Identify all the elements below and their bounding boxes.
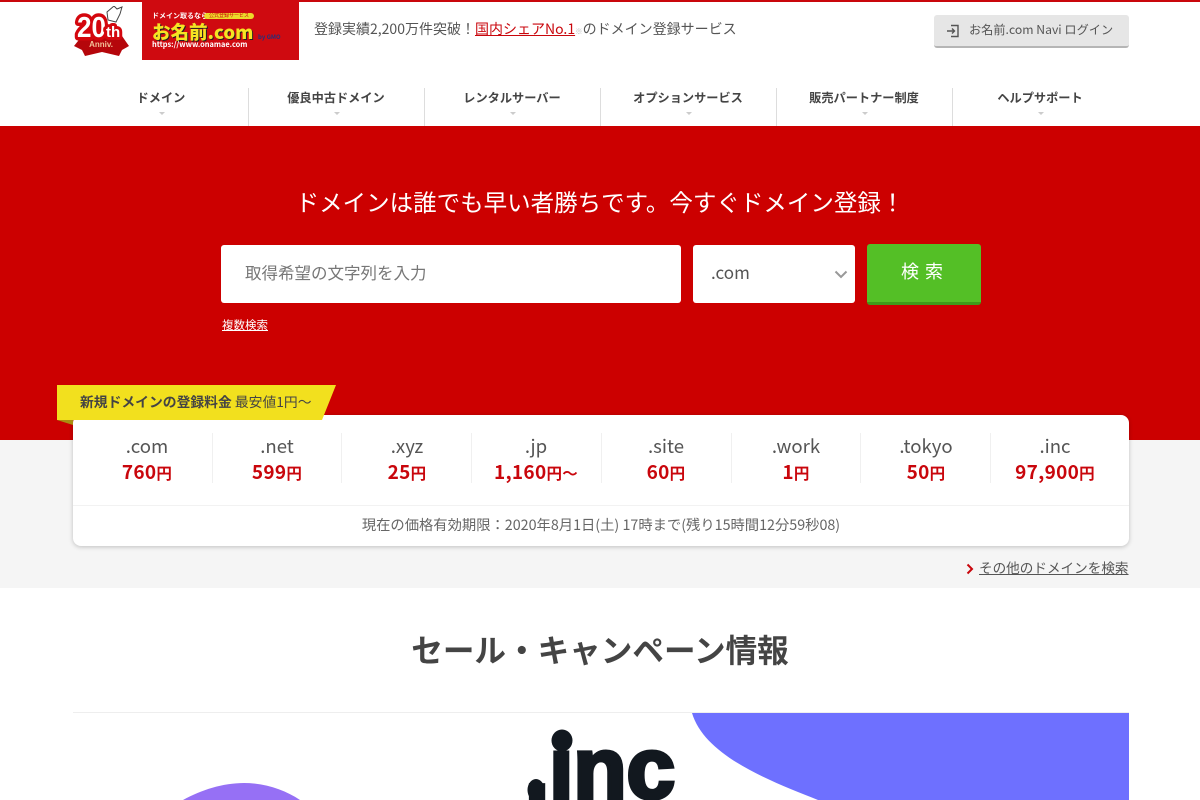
logo wordmark: お名前.com <box>152 19 253 45</box>
icon: login arrow <box>947 24 959 38</box>
ribbon text: 新規ドメインの登録料金 最安値1円～ <box>80 391 312 411</box>
price: site: 60円 <box>647 458 685 485</box>
nav item: options: オプションサービス <box>633 88 743 106</box>
price: tokyo <box>899 432 953 485</box>
nav item: rental server: レンタルサーバー <box>463 88 561 106</box>
panel: price card <box>73 415 1129 546</box>
price: jp <box>494 432 578 485</box>
banner purple shape <box>183 783 300 800</box>
link text: その他のドメインを検索 <box>979 557 1129 577</box>
yellow ribbon label <box>57 385 336 425</box>
price: inc <box>1015 432 1095 485</box>
price: com: 760円 <box>122 458 172 485</box>
header tagline: 登録実績2,200万件突破！国内シェアNo.1※のドメイン登録サービス <box>314 19 737 39</box>
nav item: used domain: 優良中古ドメイン <box>287 88 385 106</box>
price: tokyo: 50円 <box>907 458 945 485</box>
login button <box>934 15 1129 48</box>
top red rule <box>0 0 1200 2</box>
icon: 20th anniversary badge <box>74 6 129 56</box>
panel: hero search <box>0 126 1200 440</box>
icon: 20th anniversary badge: th <box>106 24 120 41</box>
icon: chevron <box>834 270 848 278</box>
icon: chevron right <box>966 564 974 574</box>
price: site <box>647 432 685 485</box>
price: inc: .inc <box>1039 432 1071 459</box>
hero heading: ドメインは誰でも早い者勝ちです。今すぐドメイン登録！ <box>296 184 904 218</box>
search input <box>221 245 681 303</box>
login label: お名前.com Navi ログイン <box>969 20 1113 38</box>
price: jp: .jp <box>525 432 547 459</box>
nav item: domain: ドメイン <box>137 88 185 106</box>
panel: grey price band <box>0 440 1200 588</box>
price: xyz <box>388 432 426 485</box>
other domains link <box>966 557 1129 577</box>
price: tokyo: .tokyo <box>899 432 953 459</box>
logo url: https://www.onamae.com <box>152 39 247 50</box>
price: net <box>252 432 302 485</box>
multiple search link: 複数検索 <box>222 317 268 333</box>
price: com <box>122 432 172 485</box>
price: com: .com <box>126 432 168 459</box>
logo: onamae.com <box>142 0 299 60</box>
logo GMO mark: by GMO <box>258 32 281 41</box>
icon: 20th anniversary badge: Anniv. <box>89 40 113 49</box>
price: site: .site <box>648 432 684 459</box>
price: xyz: .xyz <box>391 432 423 459</box>
banner blue shape <box>692 713 1129 800</box>
logo yellow tag: 公式登録サービス <box>209 12 249 19</box>
price: inc: 97,900円 <box>1015 458 1095 485</box>
price: net: .net <box>260 432 294 459</box>
select value: .com <box>711 259 750 284</box>
ribbon shape <box>57 385 336 425</box>
nav item: help: ヘルプサポート <box>997 88 1083 106</box>
price: xyz: 25円 <box>388 458 426 485</box>
price validity note: 現在の価格有効期限：2020年8月1日(土) 17時まで(残り15時間12分59秒08) <box>362 514 840 535</box>
logo tagline: ドメイン取るなら <box>152 11 208 21</box>
price: net: 599円 <box>252 458 302 485</box>
section heading: セール・キャンペーン情報 <box>411 626 789 672</box>
price: jp: 1,160円～ <box>494 458 578 485</box>
navigation menu <box>137 88 1083 126</box>
price: work <box>772 432 820 485</box>
input placeholder: 取得希望の文字列を入力 <box>245 260 426 284</box>
search button: 検索 <box>901 258 949 284</box>
search button <box>867 244 981 305</box>
nav item: partner: 販売パートナー制度 <box>809 88 919 106</box>
price: work: 1円 <box>782 458 810 485</box>
price: work: .work <box>772 432 820 459</box>
icon: 20th anniversary badge: 20 <box>77 12 106 44</box>
campaign banner <box>73 712 1129 800</box>
tld select <box>693 245 855 303</box>
